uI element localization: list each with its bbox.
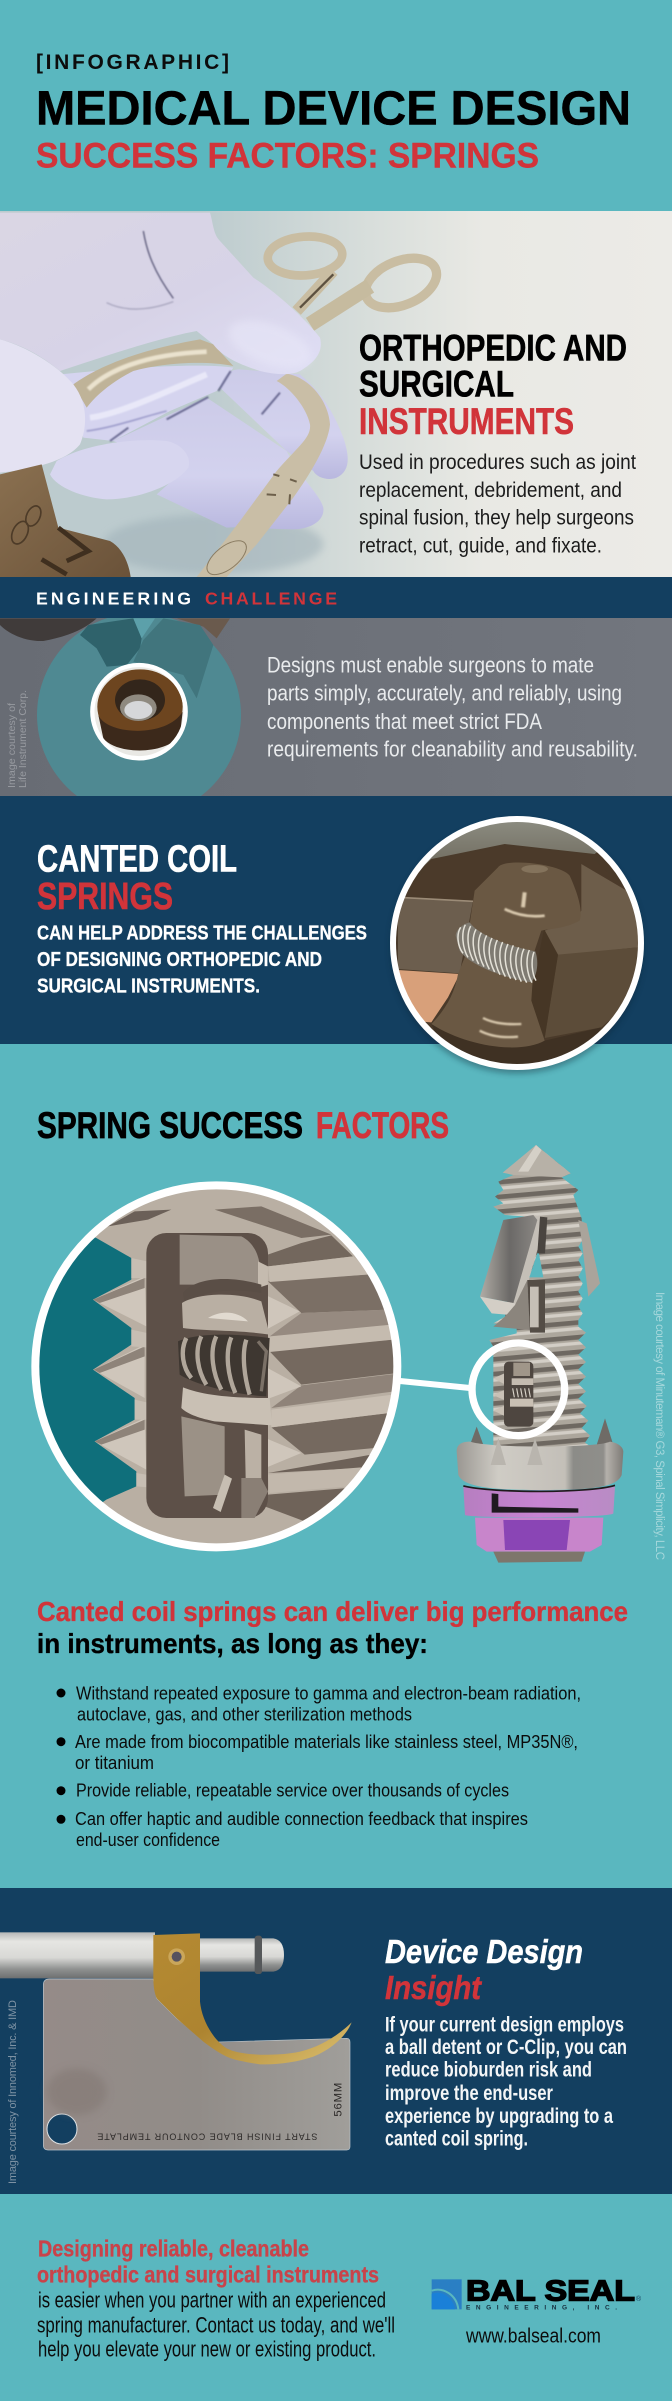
screw collar spikes	[469, 1418, 613, 1447]
insight text: improve the end-user	[385, 2082, 553, 2105]
brown block	[0, 464, 131, 577]
heading: canted coil springs performance	[37, 1596, 628, 1659]
connector line	[400, 1381, 470, 1388]
panel: challenge description	[0, 618, 672, 796]
bullet 2: or titanium	[75, 1752, 154, 1773]
heading: device design insight: Device Design	[385, 1933, 583, 1970]
panel: device design insight	[0, 1888, 672, 2194]
curved instrument body	[197, 374, 330, 577]
insight text	[385, 2014, 627, 2151]
canted coil text: SURGICAL INSTRUMENTS.	[37, 976, 260, 998]
screw implant illustration	[457, 1145, 623, 1563]
image credit: innomed: Image courtesy of Innomed, Inc. & IMD	[7, 2000, 19, 2184]
upper spring band	[182, 1295, 270, 1335]
bullet 1: autoclave, gas, and other sterilization methods	[77, 1703, 412, 1724]
slot	[146, 1233, 268, 1518]
closing call to action	[37, 2236, 395, 2362]
lower spring band	[181, 1387, 272, 1425]
body text	[359, 450, 636, 558]
bullet 1	[56, 1682, 581, 1724]
closing heading	[37, 2236, 379, 2287]
right thread bands	[268, 1256, 375, 1282]
panel: engineering challenge banner: CHALLENGE	[205, 588, 337, 608]
heading: canted coil springs performance: in instruments, as long as they:	[37, 1628, 428, 1659]
teal circle with instrument jaws	[0, 618, 241, 796]
body text: retract, cut, guide, and fixate.	[359, 534, 602, 558]
instrument photo: blade contour template: 56MM	[333, 2083, 345, 2117]
canted coil text	[37, 922, 367, 998]
bullet 4: Can offer haptic and audible connection feedback that inspires	[75, 1808, 528, 1829]
bullet 4	[56, 1808, 528, 1850]
lower fingers	[220, 369, 348, 479]
screw collar	[457, 1442, 623, 1490]
closing heading: Designing reliable, cleanable	[38, 2236, 309, 2262]
challenge text	[267, 653, 638, 762]
closing text: is easier when you partner with an experienced	[38, 2288, 386, 2313]
closing text: spring manufacturer. Contact us today, and we'll	[37, 2312, 395, 2337]
challenge text: components that meet strict FDA	[267, 709, 542, 734]
bullet 4: end-user confidence	[76, 1829, 220, 1850]
website: www.balseal.com	[465, 2325, 601, 2347]
spring coil	[178, 1335, 270, 1396]
right thread teeth	[268, 1296, 302, 1467]
insight text: reduce bioburden risk and	[385, 2059, 592, 2082]
bullet 2: Are made from biocompatible materials like stainless steel, MP35N®,	[75, 1731, 578, 1752]
body text: Used in procedures such as joint	[359, 450, 636, 474]
small magnifier circle on screw	[472, 1343, 565, 1437]
insight text: experience by upgrading to a	[385, 2105, 613, 2128]
challenge text: Designs must enable surgeons to mate	[267, 653, 594, 678]
left thumb	[0, 339, 85, 473]
bullet 3: Provide reliable, repeatable service over thousands of cycles	[76, 1780, 509, 1801]
instrument handle rings	[266, 234, 444, 324]
panel: canted coil springs	[0, 796, 672, 1044]
bullet 2	[56, 1731, 578, 1773]
left thread teeth	[93, 1276, 146, 1470]
lower hand palm	[60, 366, 233, 441]
logo: Bal Seal Engineering: BAL SEAL	[466, 2276, 635, 2308]
large magnified circle: spring in screw	[28, 1185, 398, 1555]
instrument photo: blade contour template: START FINISH BLADE CONTOUR TEMPLATE	[97, 2131, 317, 2141]
header	[36, 51, 631, 176]
dark teal background	[39, 1238, 136, 1502]
lower column and pin	[181, 1416, 225, 1496]
image credit	[6, 690, 29, 788]
canted coil text: CAN HELP ADDRESS THE CHALLENGES	[37, 922, 367, 944]
image credit: minuteman: Image courtesy of Minuteman® G3, Spinal Simplicity, LLC	[653, 1292, 665, 1560]
main title: MEDICAL DEVICE DESIGN	[36, 82, 631, 136]
image credit: Life Instrument Corp.	[17, 690, 29, 788]
closing text: help you elevate your new or existing product.	[38, 2337, 376, 2362]
logo: Bal Seal Engineering: ENGINEERING, INC.	[466, 2304, 617, 2312]
closing heading: orthopedic and surgical instruments	[37, 2261, 379, 2287]
canted coil text: OF DESIGNING ORTHOPEDIC AND	[37, 949, 322, 971]
bullet 1: Withstand repeated exposure to gamma and electron-beam radiation,	[76, 1682, 581, 1704]
heading: canted coil springs: CANTED COIL	[37, 839, 237, 881]
closing text	[37, 2288, 395, 2362]
photo: gloved hands holding surgical instrument	[0, 213, 444, 581]
right thread grooves	[268, 1274, 388, 1313]
heading: spring success factors: FACTORS	[316, 1105, 449, 1146]
heading: device design insight: Insight	[385, 1969, 483, 2006]
header eyebrow: [INFOGRAPHIC]	[36, 51, 229, 74]
logo: Bal Seal Engineering	[432, 2276, 642, 2312]
heading: canted coil springs	[37, 839, 237, 918]
heading: canted coil springs: SPRINGS	[37, 876, 173, 918]
body text: replacement, debridement, and	[359, 478, 622, 502]
top thread grooves	[108, 1210, 171, 1226]
body text: spinal fusion, they help surgeons	[359, 506, 634, 530]
insight text: canted coil spring.	[385, 2128, 528, 2151]
photo circle: spring on instrument post	[388, 814, 646, 1074]
coil on post	[456, 922, 537, 982]
panel: orthopedic and surgical instruments	[0, 211, 672, 581]
heading: orthopedic and surgical instruments	[359, 328, 627, 442]
challenge text: parts simply, accurately, and reliably, using	[267, 681, 622, 706]
detail photo: instrument socket	[92, 665, 186, 758]
panel: engineering challenge banner	[0, 577, 672, 618]
heading: orthopedic and surgical instruments: INSTRUMENTS	[359, 401, 574, 442]
image credit: Image courtesy of	[6, 703, 18, 788]
purple locking nut	[463, 1487, 615, 1517]
subtitle: SUCCESS FACTORS: SPRINGS	[36, 136, 539, 176]
screw shaft	[489, 1145, 593, 1448]
screw side flaps	[578, 1220, 600, 1297]
upper glove	[0, 213, 321, 374]
bullet list	[56, 1682, 581, 1850]
heading: spring success factors: SPRING SUCCESS	[37, 1105, 303, 1146]
panel: engineering challenge banner: ENGINEERING	[36, 588, 191, 608]
instrument photo: blade contour template	[0, 1932, 352, 2150]
heading: device design insight	[385, 1933, 583, 2006]
heading: canted coil springs performance: Canted coil springs can deliver big performance	[37, 1596, 628, 1627]
logo: Bal Seal Engineering: ®	[636, 2295, 642, 2303]
heading: orthopedic and surgical instruments: SURGICAL	[359, 364, 514, 404]
